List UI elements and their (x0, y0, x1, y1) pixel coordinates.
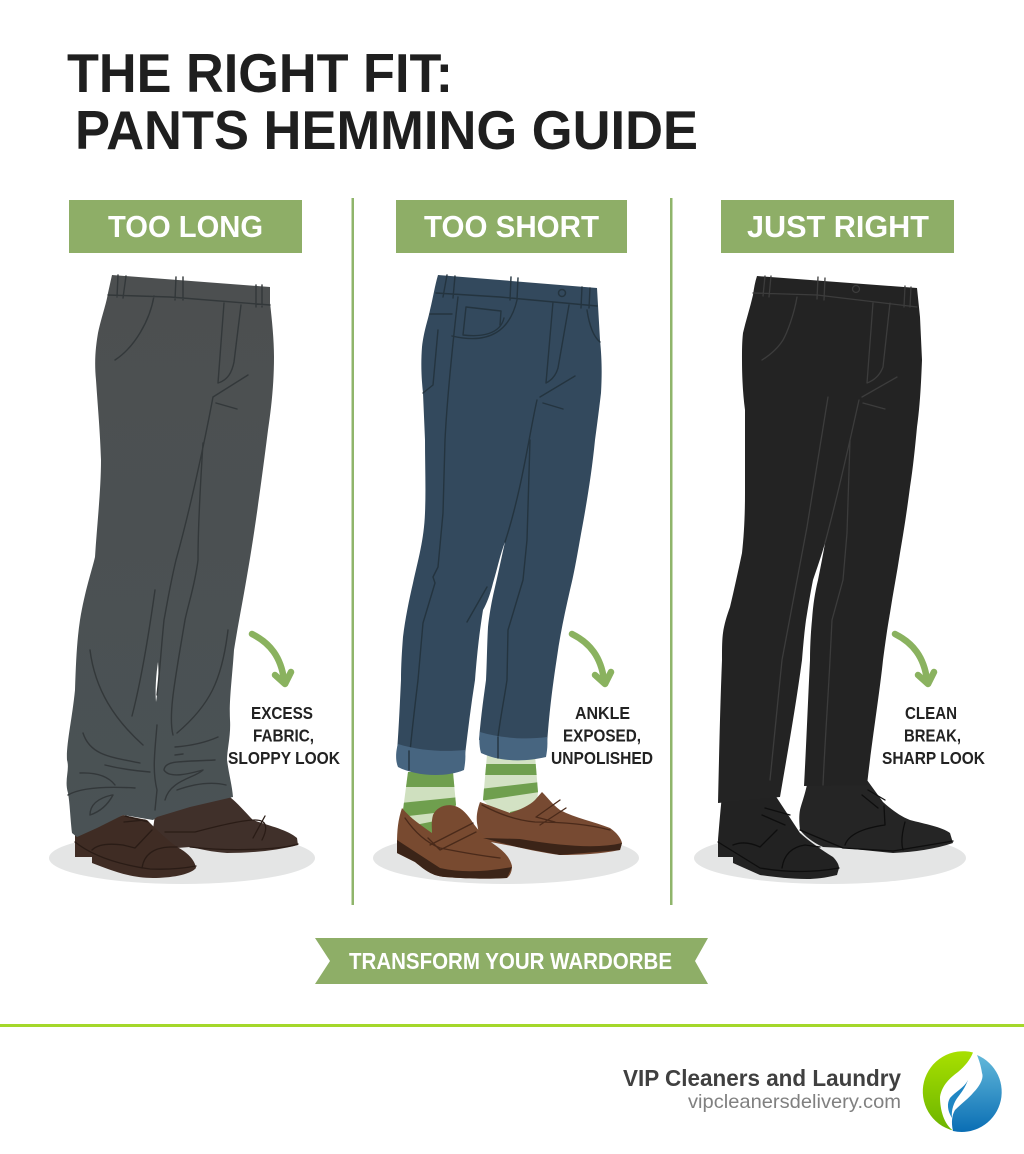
label: just right: SHARP LOOK (882, 748, 985, 768)
label: too short: ANKLE (575, 703, 630, 723)
illustration: blue cropped jeans (397, 275, 602, 755)
shoe shadow (49, 832, 315, 884)
footer: company name: VIP Cleaners and Laundry (623, 1065, 901, 1091)
heading: too short: TOO SHORT (424, 209, 599, 244)
illustration: brown derby shoes (75, 795, 298, 878)
heading: too long (69, 200, 302, 253)
arrow: too short (572, 634, 611, 684)
footer: company name (623, 1065, 901, 1113)
shoe shadow (694, 832, 966, 884)
label: too long: FABRIC, (253, 726, 314, 746)
panel: just right (694, 200, 985, 884)
label: too short: UNPOLISHED (551, 748, 653, 768)
label: just right: CLEAN (905, 703, 957, 723)
illustration: brown loafers (397, 792, 622, 879)
divider (352, 198, 354, 905)
illustration: black tailored pants (718, 276, 922, 803)
arrow: too long (252, 634, 291, 684)
banner: transform your wardrobe: TRANSFORM YOUR WARDORBE (349, 948, 672, 974)
label: just right (882, 703, 985, 768)
heading: just right (721, 200, 954, 253)
label: just right: BREAK, (904, 726, 961, 746)
icon: logo (923, 1051, 1002, 1132)
illustration: black oxford shoes (718, 780, 953, 879)
label: too short: EXPOSED, (563, 726, 641, 746)
banner: transform your wardrobe (315, 938, 708, 984)
footer: company name: vipcleanersdelivery.com (688, 1091, 901, 1113)
panel: too short (373, 200, 653, 884)
panel: too long (49, 200, 340, 884)
title: PANTS HEMMING GUIDE (75, 100, 698, 161)
title: THE RIGHT FIT: (67, 43, 453, 104)
illustration: grey long pants (67, 275, 274, 837)
footer rule (0, 1024, 1024, 1027)
heading: too short (396, 200, 627, 253)
heading: too long: TOO LONG (108, 209, 263, 244)
label: too short (551, 703, 653, 768)
illustration: jean cuffs (396, 732, 547, 775)
shoe shadow (373, 832, 639, 884)
title (67, 43, 698, 161)
illustration: striped socks (403, 756, 538, 833)
heading: just right: JUST RIGHT (747, 209, 929, 244)
label: too long (228, 703, 340, 768)
arrow: just right (895, 634, 934, 684)
label: too long: EXCESS (251, 703, 313, 723)
label: too long: SLOPPY LOOK (228, 748, 340, 768)
divider (670, 198, 672, 905)
